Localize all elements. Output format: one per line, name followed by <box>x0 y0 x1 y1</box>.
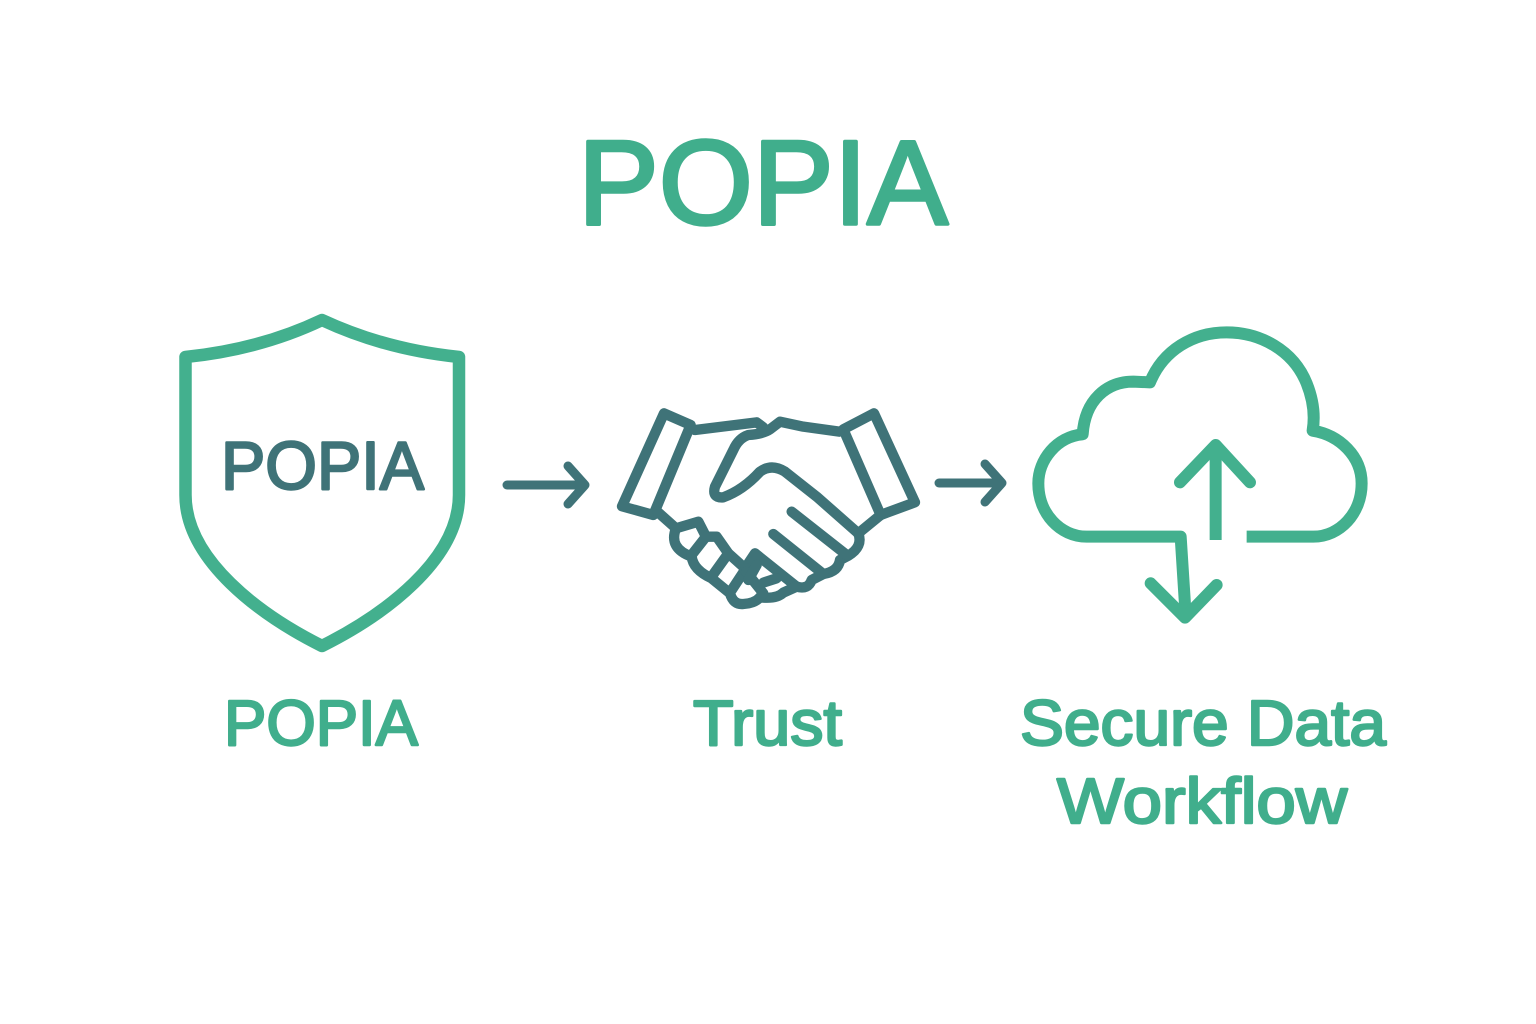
arrow: shield to handshake <box>507 466 585 504</box>
label: POPIA: POPIA <box>224 687 418 759</box>
label: Secure Data Workflow: Secure Data <box>1020 687 1386 759</box>
icon: cloud with up and down arrows <box>1038 332 1362 618</box>
arrow: handshake to cloud <box>939 464 1002 502</box>
label: Trust: Trust <box>693 687 842 759</box>
icon: shield with POPIA <box>186 320 459 646</box>
label: Secure Data Workflow: Workflow <box>1057 765 1348 837</box>
title: POPIA <box>578 116 948 250</box>
label: Secure Data Workflow <box>1020 687 1386 837</box>
icon: handshake <box>622 413 915 604</box>
shield text: POPIA <box>221 428 425 504</box>
